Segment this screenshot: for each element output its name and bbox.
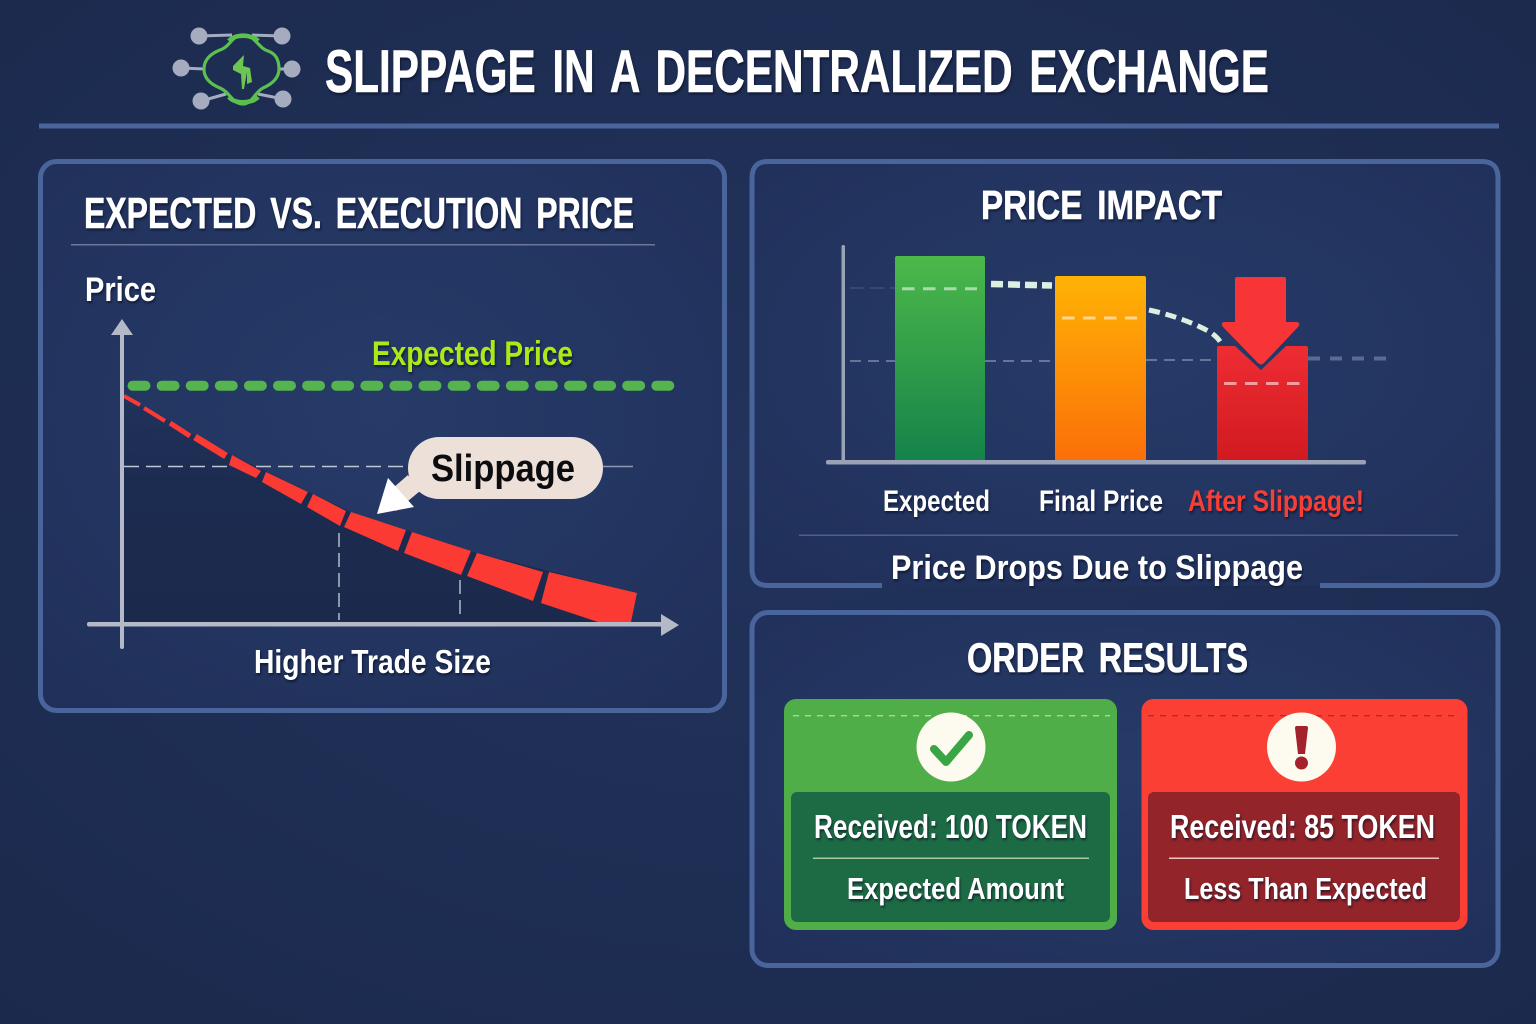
slippage callout: Slippage xyxy=(431,448,575,490)
bar chart xyxy=(826,245,1387,464)
panel: price impact xyxy=(752,162,1498,587)
received amount: Received: 100 TOKEN xyxy=(814,808,1087,845)
icon: down arrow xyxy=(1222,277,1299,364)
price impact caption: Price Drops Due to Slippage xyxy=(891,549,1303,587)
status text: Expected Amount xyxy=(847,871,1064,906)
panel: expected vs execution price xyxy=(40,162,724,710)
execution price falling line xyxy=(124,396,637,622)
header icon: token network xyxy=(172,28,300,110)
header divider xyxy=(39,124,1499,128)
bar label: after slippage: After Slippage! xyxy=(1188,485,1364,518)
bar: final price xyxy=(1055,276,1146,460)
axes xyxy=(87,319,679,649)
expected price label: Expected Price xyxy=(372,335,573,373)
card: slippage result xyxy=(1142,699,1468,930)
line chart: price versus trade size xyxy=(87,319,679,649)
icon: exclamation mark xyxy=(1267,712,1336,782)
bar: after slippage xyxy=(1217,346,1308,460)
received amount: Received: 85 TOKEN xyxy=(1170,808,1435,845)
bar label: expected: Expected xyxy=(883,485,990,518)
expected price dashed line xyxy=(132,381,670,391)
card: expected result xyxy=(784,699,1117,930)
y axis label: Price xyxy=(85,271,156,309)
panel heading: EXPECTED VS. EXECUTION PRICE xyxy=(84,189,634,238)
bar label: final price: Final Price xyxy=(1039,485,1163,518)
icon: check mark xyxy=(916,712,986,782)
x axis label: Higher Trade Size xyxy=(254,643,491,680)
status text: Less Than Expected xyxy=(1184,871,1427,906)
slippage callout xyxy=(377,437,603,514)
bar: expected xyxy=(895,256,985,460)
panel heading: PRICE IMPACT xyxy=(981,182,1222,228)
panel: order results xyxy=(752,612,1498,966)
axes xyxy=(826,245,1366,464)
connector: price decline xyxy=(991,284,1222,345)
panel heading: ORDER RESULTS xyxy=(967,634,1248,681)
